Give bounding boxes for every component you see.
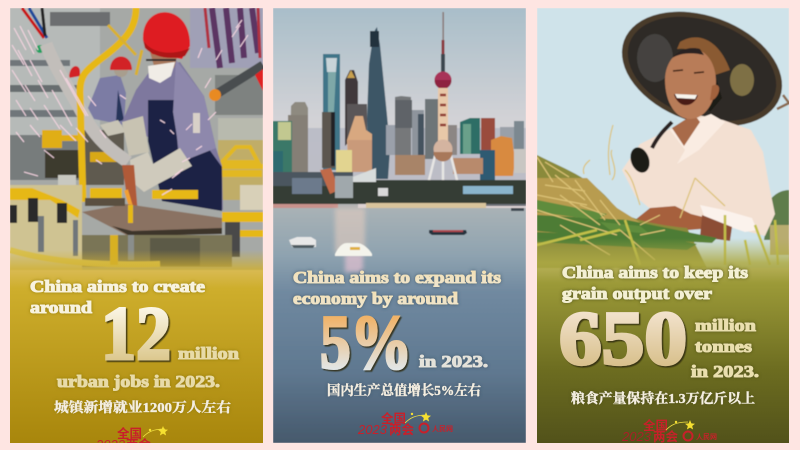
shirt: [622, 115, 775, 236]
big number: 5%: 5%: [320, 301, 412, 385]
face: [708, 82, 722, 112]
main worker: [122, 62, 223, 210]
panel: urban jobs: [10, 8, 263, 450]
Chinese caption: grain: 粮食产量保持在1.3万亿斤以上: [571, 390, 756, 406]
olive gradient text panel: [537, 238, 789, 443]
photo: Shanghai skyline: [273, 8, 526, 443]
panel: grain output: [537, 0, 798, 444]
heading: China aims to expand its economy: China aims to expand its: [293, 268, 501, 287]
logo: 2023 two sessions, darker: 2023: [621, 429, 652, 444]
text: million tonnes in 2023: [691, 316, 759, 381]
rice bundle: [537, 155, 707, 268]
sparks: [12, 20, 248, 195]
logo: 2023 two sessions, darker: 两会: [653, 429, 679, 444]
water: [273, 208, 526, 443]
fixtures and table: [82, 204, 222, 237]
heading: China aims to create around: [30, 277, 206, 317]
logo: 2023 two sessions (cropped): [97, 426, 168, 443]
hands: [635, 206, 703, 231]
boats: [289, 237, 316, 247]
heading: China aims to create around: around: [30, 298, 93, 317]
logo: 2023 two sessions: 人民网: [432, 425, 453, 433]
photo: welder in a car factory: [10, 8, 263, 270]
yellow beam: [80, 8, 136, 202]
back worker: [88, 75, 126, 125]
Chinese caption: GDP: 国内生产总值增长5%左右: [327, 382, 481, 398]
Chinese caption: jobs: 城镇新增就业1200万人左右: [54, 399, 232, 415]
text: million tonnes in 2023: tonnes: [695, 337, 752, 356]
text: million tonnes in 2023: million: [695, 316, 757, 335]
gold gradient text panel: [10, 250, 263, 443]
logo: 2023 two sessions, darker: 人民网: [696, 433, 717, 441]
text: million urban jobs: [57, 344, 240, 391]
Oriental Pearl Tower: [428, 12, 458, 184]
heading: China aims to expand its economy: [293, 268, 501, 308]
heading: China aims to expand its economy: economy by around: [293, 289, 459, 308]
logo: 2023 two sessions: 全国: [381, 411, 406, 426]
heading: China aims to keep its grain output: [562, 263, 748, 303]
text: million urban jobs: million: [178, 344, 240, 363]
logo: 2023 two sessions: 2023: [357, 422, 388, 437]
braid: [652, 122, 672, 148]
wires and hose: [22, 8, 44, 38]
text: in 2023: in 2023.: [419, 352, 488, 371]
panel: GDP growth: [273, 8, 526, 443]
big number: 12: 12: [101, 292, 171, 376]
conical hat: [621, 11, 783, 126]
photo: smiling farmer with rice: [537, 0, 798, 268]
heading: China aims to keep its grain output: China aims to keep its: [562, 263, 748, 282]
towers: [367, 27, 390, 179]
logo: 2023 two sessions, darker: 全国: [643, 418, 668, 433]
logo: 2023 two sessions, darker: [622, 419, 716, 442]
text: million urban jobs: urban jobs in 2023.: [57, 372, 220, 391]
logo: 2023 two sessions: 两会: [389, 422, 415, 437]
shore: [273, 180, 526, 204]
logo: 2023 two sessions: [358, 412, 452, 436]
logo: 2023 two sessions (cropped): 全国: [117, 426, 142, 441]
heading: China aims to create around: China aims to create: [30, 277, 206, 296]
text: million tonnes in 2023: in 2023.: [691, 362, 759, 381]
big number: 650: 650: [559, 297, 687, 381]
heading: China aims to keep its grain output: grain output over: [562, 284, 713, 303]
